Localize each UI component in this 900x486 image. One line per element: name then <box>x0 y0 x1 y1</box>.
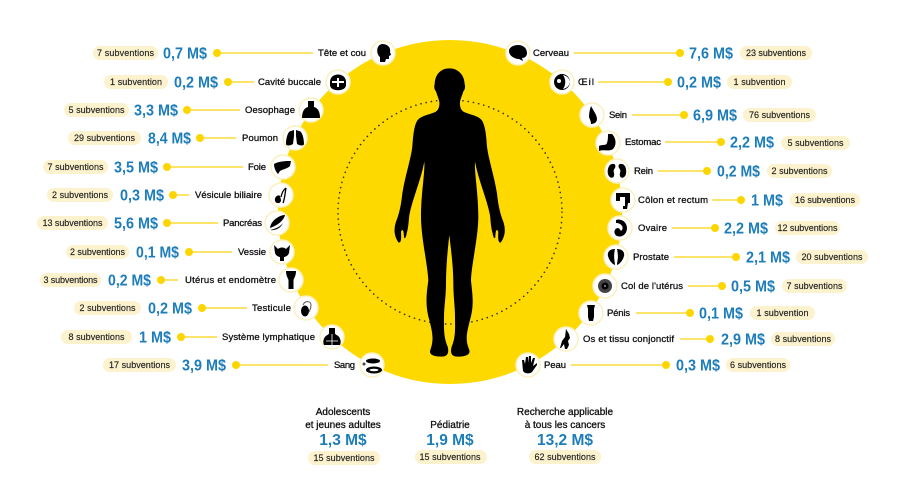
connector <box>157 276 178 284</box>
icon: lungs <box>283 126 307 150</box>
label: Pancréas <box>223 218 262 229</box>
pill: 20 subventions: 20 subventions <box>802 252 863 262</box>
pill: 5 subventions: 5 subventions <box>788 138 844 148</box>
value: 6,9 M$ <box>693 108 737 124</box>
value: 0,2 M$ <box>717 164 760 180</box>
icon: oesophagus <box>299 98 323 122</box>
connector <box>185 248 232 256</box>
value: 1,3 M$ <box>319 432 367 449</box>
value: 7,6 M$ <box>689 46 733 62</box>
pill: 23 subventions <box>740 46 812 60</box>
pill: 7 subventions <box>782 279 847 293</box>
icon: cervix <box>593 274 617 298</box>
pill: 1 subvention <box>750 306 815 320</box>
pill: 2 subventions <box>74 301 141 315</box>
pill: 29 subventions <box>68 131 141 145</box>
value: 0,3 M$ <box>676 358 720 374</box>
value: 0,2 M$ <box>677 74 721 92</box>
row: Oesophage <box>64 98 323 122</box>
icon: gallbladder <box>269 183 293 207</box>
value: 0,7 M$ <box>163 46 207 62</box>
yellow central circle <box>278 40 622 384</box>
label: Adolescents <box>316 407 370 418</box>
row: Cerveau <box>506 41 812 65</box>
value: 0,2 M$ <box>148 300 192 318</box>
label: Œil <box>578 77 594 88</box>
label: Pénis <box>607 308 630 319</box>
pill: 76 subventions <box>743 108 816 122</box>
connector <box>232 361 328 369</box>
connector <box>213 49 313 57</box>
label: Cerveau <box>533 48 569 59</box>
row: Foie <box>43 155 295 179</box>
value: 2,2 M$ <box>724 220 768 238</box>
icon: ovary <box>608 216 632 240</box>
icon: eye <box>550 70 574 94</box>
connector <box>224 78 254 86</box>
pill: 20 subventions <box>796 250 868 264</box>
value: 0,1 M$ <box>699 306 743 322</box>
pill: 7 subventions: 7 subventions <box>48 162 104 172</box>
row: Pancréas <box>37 211 289 235</box>
pill: 17 subventions: 17 subventions <box>109 360 170 370</box>
icon: head <box>371 41 395 65</box>
human body silhouette <box>395 68 505 357</box>
pill: 16 subventions: 16 subventions <box>795 195 856 205</box>
connector <box>712 196 745 204</box>
value: 1 M$ <box>139 330 171 346</box>
value: 2,2 M$ <box>730 134 774 152</box>
pill: 12 subventions <box>775 221 840 235</box>
icon: uterus <box>279 268 303 292</box>
value: 0,3 M$ <box>120 188 164 204</box>
label: Rein <box>634 166 653 177</box>
pill: 3 subventions: 3 subventions <box>44 275 98 285</box>
row: Œil <box>550 70 792 94</box>
icon: colon <box>611 188 635 212</box>
icon: bladder <box>270 240 294 264</box>
label: Sang <box>334 360 355 371</box>
value: 1 M$ <box>751 192 783 210</box>
label: Foie <box>248 162 266 173</box>
dotted inner circle <box>338 100 562 324</box>
pill: 5 subventions <box>781 136 850 150</box>
value: 2,9 M$ <box>721 332 765 348</box>
icon: lymphatic system <box>320 325 344 349</box>
value: 3,5 M$ <box>114 160 158 176</box>
label: Vessie <box>238 247 266 258</box>
pill: 8 subventions: 8 subventions <box>68 332 125 342</box>
connector <box>571 361 670 369</box>
row: Col de l'utérus <box>593 274 847 298</box>
row: Testicule <box>74 296 318 320</box>
label: Peau <box>544 360 566 371</box>
value: 3,9 M$ <box>182 358 226 374</box>
pill: 17 subventions <box>103 358 176 372</box>
connector <box>658 167 711 175</box>
connector <box>574 49 684 57</box>
row: Sang <box>103 353 384 377</box>
label: et jeunes adultes <box>305 420 381 431</box>
connector <box>163 219 218 227</box>
icon: pancreas <box>265 211 289 235</box>
row: Estomac <box>596 131 850 155</box>
label: Os et tissu conjonctif <box>583 334 674 345</box>
block: Adolescents et jeunes adultes <box>305 407 381 465</box>
label: Vésicule biliaire <box>195 190 262 201</box>
row: Prostate <box>604 245 868 269</box>
row: Ovaire <box>608 216 840 240</box>
pill: 2 subventions <box>47 188 113 202</box>
connector <box>688 282 726 290</box>
row: Utérus et endomètre <box>40 268 303 292</box>
pill: 15 subventions: 15 subventions <box>420 452 481 462</box>
pill: 13 subventions <box>37 216 108 230</box>
value: 0,2 M$ <box>174 74 218 92</box>
value: 0,1 M$ <box>136 244 179 262</box>
pill: 7 subventions <box>93 46 158 60</box>
icon: breast <box>580 103 604 127</box>
value: 2,1 M$ <box>746 250 790 266</box>
connector <box>598 78 672 86</box>
connector <box>674 253 740 261</box>
label: Recherche applicable <box>517 407 614 418</box>
label: Poumon <box>242 133 278 144</box>
value: 8,4 M$ <box>148 130 191 148</box>
icon: mouth <box>326 70 350 94</box>
pill: 1 subvention: 1 subvention <box>734 77 786 87</box>
label: Testicule <box>252 303 291 314</box>
label: à tous les cancers <box>525 420 605 431</box>
pill: 62 subventions: 62 subventions <box>534 452 596 462</box>
pill: 1 subvention <box>727 75 792 89</box>
connector <box>632 111 688 119</box>
block: Recherche applicable à tous les cancers <box>517 407 614 464</box>
label: Ovaire <box>638 223 667 234</box>
label: Système lymphatique <box>222 332 315 343</box>
value: 1,9 M$ <box>426 432 474 449</box>
connector <box>177 333 217 341</box>
value: 3,3 M$ <box>134 102 178 120</box>
pill: 7 subventions: 7 subventions <box>97 48 154 58</box>
icon: hand <box>516 353 540 377</box>
pill: 15 subventions: 15 subventions <box>314 453 375 463</box>
pill: 1 subvention <box>104 75 168 89</box>
pill: 1 subvention: 1 subvention <box>756 308 808 318</box>
icon: liver <box>271 155 295 179</box>
label: Utérus et endomètre <box>185 275 276 286</box>
pill: 1 subvention: 1 subvention <box>110 77 162 87</box>
pill: 13 subventions: 13 subventions <box>42 218 103 228</box>
value: 13,2 M$ <box>537 432 593 449</box>
label: Côlon et rectum <box>638 195 708 206</box>
connector <box>196 134 236 142</box>
row: Pénis <box>579 301 815 325</box>
pill: 6 subventions: 6 subventions <box>730 360 786 370</box>
value: 0,2 M$ <box>108 272 151 290</box>
connector <box>169 191 189 199</box>
label: Estomac <box>625 137 661 148</box>
row: Vésicule biliaire <box>47 183 293 207</box>
connector <box>680 335 714 343</box>
value: 0,5 M$ <box>731 278 775 296</box>
connector <box>672 224 719 232</box>
pill: 2 subventions <box>66 245 129 259</box>
pill: 8 subventions: 8 subventions <box>775 334 832 344</box>
row: Vessie <box>66 240 294 264</box>
connector <box>163 163 243 171</box>
pill: 23 subventions: 23 subventions <box>746 48 806 58</box>
pill: 8 subventions <box>61 330 132 344</box>
label: Col de l'utérus <box>621 281 683 292</box>
pill: 2 subventions: 2 subventions <box>52 190 108 200</box>
icon: stomach <box>596 131 620 155</box>
pill: 3 subventions <box>40 273 101 287</box>
connector <box>183 106 240 114</box>
label: Tête et cou <box>318 48 366 59</box>
pill: 2 subventions: 2 subventions <box>80 303 136 313</box>
label: Sein <box>609 110 627 121</box>
icon: bone and joint <box>554 327 578 351</box>
row: Rein <box>605 159 832 183</box>
label: Oesophage <box>245 105 295 116</box>
pill: 2 subventions: 2 subventions <box>70 247 126 257</box>
connector <box>636 309 694 317</box>
row: Poumon <box>68 126 307 150</box>
label: Prostate <box>633 252 669 263</box>
row: Peau <box>516 353 790 377</box>
connector <box>198 304 247 312</box>
row: Os et tissu conjonctif <box>554 327 835 351</box>
icon: penis <box>579 301 603 325</box>
icon: kidneys <box>605 159 629 183</box>
pill: 5 subventions: 5 subventions <box>68 105 125 115</box>
connector <box>665 138 725 146</box>
pill: 2 subventions <box>767 164 832 178</box>
pill: 16 subventions <box>790 193 860 207</box>
pill: 12 subventions: 12 subventions <box>778 223 838 233</box>
icon: brain <box>506 41 530 65</box>
row: Système lymphatique <box>61 325 344 349</box>
pill: 2 subventions: 2 subventions <box>772 166 828 176</box>
label: Pédiatrie <box>430 420 470 431</box>
pill: 6 subventions <box>726 358 790 372</box>
pill: 5 subventions <box>64 103 129 117</box>
row: Cavité buccale <box>104 70 350 94</box>
value: 5,6 M$ <box>114 216 158 232</box>
icon: blood cells <box>360 353 384 377</box>
row: Côlon et rectum <box>611 188 860 212</box>
pill: 7 subventions: 7 subventions <box>786 281 843 291</box>
row: Tête et cou <box>93 41 395 65</box>
block: Pédiatrie <box>415 420 487 464</box>
pill: 8 subventions <box>771 332 835 346</box>
icon: prostate <box>604 245 628 269</box>
label: Cavité buccale <box>258 77 321 88</box>
row: Sein <box>580 103 816 127</box>
icon: testicle <box>294 296 318 320</box>
pill: 29 subventions: 29 subventions <box>74 133 136 143</box>
pill: 76 subventions: 76 subventions <box>749 110 810 120</box>
pill: 7 subventions <box>43 160 108 174</box>
